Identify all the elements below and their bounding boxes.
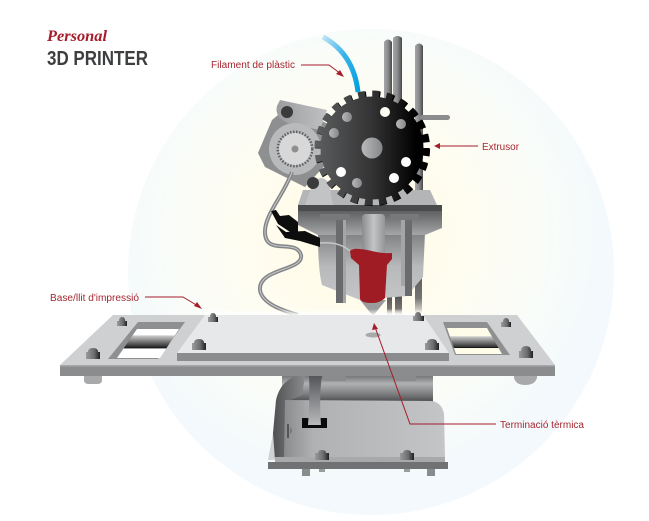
cable [260,172,301,315]
right window [443,322,510,355]
motor housing [258,100,330,187]
label: terminacio [372,323,584,431]
small cog [278,132,312,166]
lower bolts [315,450,414,460]
extruder head [298,177,442,303]
label: filament [211,60,344,77]
heating element [350,249,392,316]
label: extrusor [434,142,520,153]
background glow circle [128,29,614,515]
label: base [50,293,202,309]
title: 3D PRINTER [47,48,148,70]
black clip and wire [271,210,350,251]
lower body [268,376,448,476]
inner heated bed [177,309,449,361]
label: filament: Filament de plàstic [211,60,295,71]
label: terminacio: Terminació tèrmica [500,420,584,431]
extruder gear [318,94,427,203]
title [46,28,148,70]
print bed plate [60,315,555,376]
left window [108,322,185,359]
label: base: Base/llit d'impressió [50,293,139,304]
feet [84,376,537,385]
title: Personal [46,28,108,45]
vertical rods [384,36,450,317]
bed bolts [86,312,533,359]
filament de plastic [323,37,358,92]
label: extrusor: Extrusor [482,142,520,153]
